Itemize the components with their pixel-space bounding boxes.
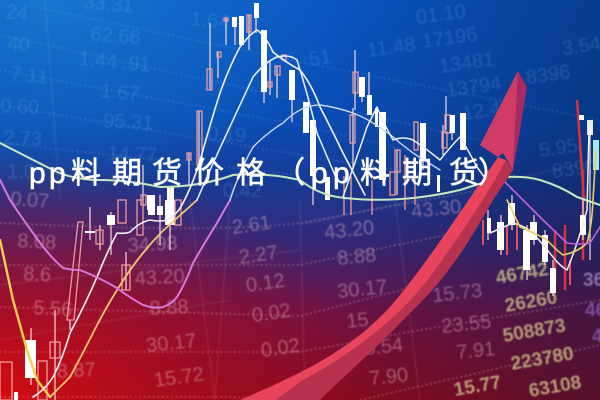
background numbers: red area: 15.72 [153,363,205,392]
background numbers: red area: 0.12 [245,270,286,297]
background numbers: red area: 30.17 [145,330,197,357]
background numbers: blue area: 40 [7,33,31,57]
line: right purple [503,180,600,244]
background numbers: red area: 2.27 [238,242,279,269]
background numbers: red area: 23.55 [440,311,492,338]
background numbers: blue area: 1.67 [100,80,140,105]
line: yellow peach [50,200,197,397]
background numbers: red area: 5.56 [33,297,73,321]
arrow head right facet [513,71,527,170]
background numbers: red area: 6.54 [363,334,404,360]
background numbers: red area: 0.02 [260,335,301,362]
line: yellow left [0,240,50,397]
background numbers: blue area: 0.42 [223,180,262,202]
background numbers: blue area: 51 [308,46,333,71]
background numbers: blue area: 62.66 [90,23,141,49]
background numbers: red area: 0.07 [10,188,50,213]
background numbers: blue area: 2.73 [3,127,43,150]
background numbers: red area: 15 [345,309,370,333]
background numbers: blue area: 95.31 [103,110,154,135]
yellow numbers column [452,259,600,400]
line: pink purple [0,180,230,308]
line: white wiggle [343,107,490,197]
background numbers: blue area: 11.48 [366,33,417,62]
background numbers: red area: 8.08 [17,230,57,254]
arrow ribbon bright edge [240,157,506,400]
candlesticks: lower left group [0,187,181,400]
background numbers: red area [10,188,496,392]
yellow numbers column: 26260 [503,287,559,317]
yellow numbers column: 223780 [509,343,575,375]
candlesticks: right group [483,100,599,296]
background numbers: blue area: 1.64 [190,8,230,33]
background numbers: red area: 2.61 [231,212,272,239]
background numbers: red area: 15.73 [431,280,483,307]
background numbers: red area: 8.6 [23,263,52,286]
background numbers: blue area [0,0,600,202]
background numbers: blue area: 13481 [438,48,496,78]
yellow numbers column: 508873 [501,315,567,347]
line: white tall [33,30,365,397]
background numbers: blue area: 14.77 [107,143,158,167]
background numbers: red area: 0.02 [251,300,292,327]
background numbers: red area: 43.20 [134,265,185,290]
background numbers: blue area: 8396 [525,61,572,89]
title: pp料期货价格（pp料期货） [29,157,508,190]
background numbers: blue area: 0.19 [207,123,247,147]
background numbers: blue area: 5.95 [538,135,579,162]
background numbers: blue area: 8390 [551,155,598,183]
line: white second [197,56,337,200]
candlesticks: middle group [303,50,466,215]
background numbers: blue area: 0.60 [0,95,40,119]
background numbers: red area: 34.98 [127,232,178,257]
background numbers: red area: 30.17 [336,276,388,303]
background numbers: blue area: 7.11 [10,63,49,88]
background numbers: red area: 8.88 [149,296,189,320]
background numbers: blue area: 13794 [445,72,503,102]
background numbers: red area: 7.91 [455,338,496,364]
background numbers: red area: 7.90 [368,364,409,390]
arrow head left facet [480,71,518,170]
background numbers: red area: 43.20 [323,217,375,244]
background numbers: blue area: 17196 [421,23,479,53]
background numbers: red area: 8.87 [56,359,96,383]
line: right white [490,130,589,270]
yellow numbers column: 46742 [494,259,550,289]
line: pale green [0,143,600,205]
line: right yellow [507,150,596,255]
background numbers: blue area: 1.44 .91 [78,48,152,76]
background numbers: blue area: 12.4 [461,98,502,125]
background numbers: red area: 8.88 [336,244,377,270]
background numbers: blue area: 01.10 [415,0,467,29]
arrow ribbon dark edge [276,160,513,400]
candlesticks: upper group [141,3,295,225]
line: pale blue to peach [230,105,440,200]
background numbers: blue area: 24 [4,1,29,25]
rising arrow [240,71,527,400]
background numbers: blue area: 1.0 [7,161,35,183]
background numbers: red area: 43.30 [410,196,462,223]
